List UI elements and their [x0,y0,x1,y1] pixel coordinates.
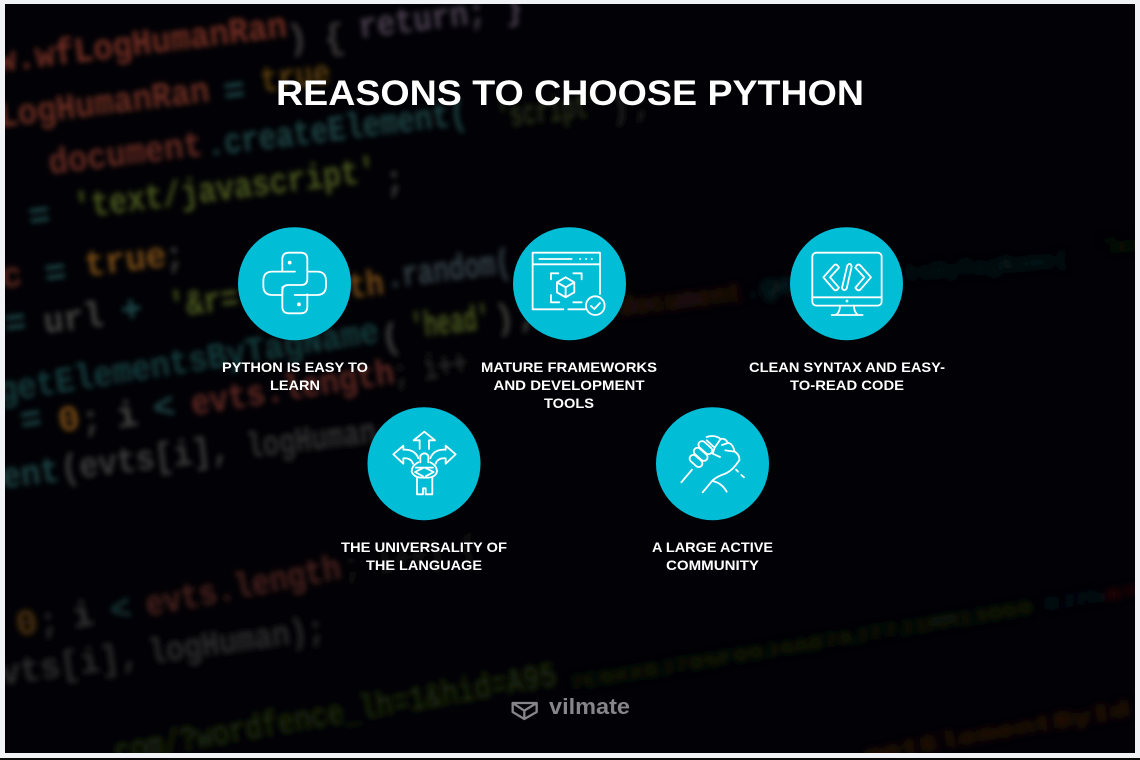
label: universality: THE UNIVERSALITY OF [341,539,507,555]
icon: python logo [263,253,326,313]
blurred code text, left: th [346,264,386,309]
logo icon [513,703,537,719]
blurred code text, left: < [150,387,178,431]
label: mature frameworks: TOOLS [544,395,594,411]
label: mature frameworks: MATURE FRAMEWORKS [481,359,657,375]
item: community [652,407,773,573]
blurred code text, left: { [321,18,348,61]
label: clean syntax: CLEAN SYNTAX AND EASY- [749,359,945,375]
label: community [652,539,773,573]
blurred code text, right: tsByTagName( [903,248,1070,287]
blurred code text, lower: vts[i], [0,636,142,696]
blurred code text, left: 'script' [494,85,604,139]
blurred code text, left: true [258,54,333,103]
item: universality [341,407,507,573]
blurred code text, left: .createElement( [204,94,469,167]
label: python is easy to learn: PYTHON IS EASY TO [222,359,368,375]
blurred code text, left: = [2,303,29,346]
blurred code text, left: 'head' [408,298,493,349]
blurred code text, right: 8J7h [1043,588,1105,616]
blurred code text, left: w.wfLogHumanRan [0,7,289,83]
icon circle: python [238,227,351,340]
blurred code text, left: ); [606,85,654,131]
blurred code text, right: 7C9XX8J78SF09J4A87AJ77J1MM13869 [567,597,1035,697]
blurred code text, right: .ge [742,270,796,307]
blurred code text, left: logHuman [244,412,378,469]
blurred code text, left: ent [0,451,62,499]
blurred code text, left: ; i++ [390,344,471,396]
icon: app window with cube [533,253,605,315]
blurred code text, left: ); [491,295,539,341]
blurred code text, left: = [26,196,53,239]
blurred code text, right: document [617,279,745,325]
label: clean syntax [749,359,945,393]
blurred code text, lower: logHuman); [146,610,328,675]
blurred code text, left: evts.length [188,353,397,426]
logo wordmark: vilmate [549,694,630,719]
item: python is easy to learn [222,227,368,393]
blurred code text, left: ; [77,399,105,443]
blurred code text, lower: i [69,595,97,639]
icon: arm wrestling hands [681,436,744,492]
title: REASONS TO CHOOSE PYTHON [276,74,864,113]
logo: vilmate [513,694,630,719]
blurred code text, right [567,233,1140,760]
label: python is easy to learn: LEARN [270,377,320,393]
icon: monitor with code [812,253,882,315]
blurred code text, left: getElementsByTagName [0,312,382,413]
label: universality [341,539,507,573]
icon circle: clean syntax [790,227,903,340]
item: clean syntax [749,227,945,393]
item: mature frameworks [481,227,657,411]
blurred code text, left: 'text/javascript' [71,151,379,229]
label: mature frameworks [481,359,657,411]
blurred code text, left: ) [284,18,311,61]
label: community: A LARGE ACTIVE [652,539,773,555]
icon circle: community [656,407,769,520]
blurred code text, left: LogHumanRan [0,71,212,138]
blurred code text, left: i [113,395,141,439]
blurred code text, left: = [42,253,69,296]
blurred code text, left: 0 [55,399,83,443]
blurred code text, left [0,0,654,499]
blurred code text, left: + [118,290,145,333]
blurred code text, left: ; [161,236,188,279]
icon circle: frameworks [513,227,626,340]
blurred code text, left: (evts[i], [58,430,232,491]
blurred code text, left: url [41,296,106,344]
blurred code text, left: true [82,236,169,287]
icon circle: universality [368,407,480,520]
blurred code text, lower: evts.length [142,549,344,627]
blurred code text, lower [0,530,560,760]
label: community: COMMUNITY [666,557,760,573]
blurred code text, left: ( [377,317,405,361]
label: mature frameworks: AND DEVELOPMENT [494,377,645,393]
blurred code text, left: = [221,71,248,114]
blurred code text, lower: < [107,589,135,633]
blurred code text, lower: 0 [13,603,41,647]
label: universality: THE LANGUAGE [366,557,482,573]
blurred code text, lower: ; i++) { [341,530,480,589]
icon: person with three arrows [393,432,456,494]
blurred code text, left: = [17,399,45,443]
blurred code text, lower: ; [35,601,63,645]
label: python is easy to learn [222,359,368,393]
blurred code text, left: .random( [384,243,513,299]
blurred code text, left: '&r= [166,279,241,328]
blurred code text, right: a= [1103,581,1140,606]
blurred code text, left: ; [381,160,408,203]
label: clean syntax: TO-READ CODE [790,377,904,393]
blurred code text, left: document [46,125,205,185]
